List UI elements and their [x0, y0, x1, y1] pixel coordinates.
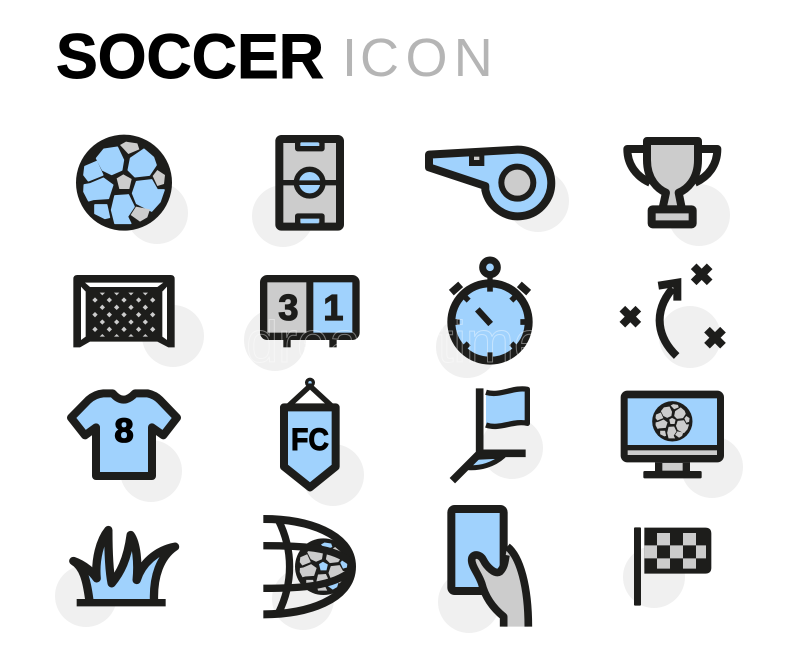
icon: checkered flag: [634, 527, 711, 606]
title: [56, 22, 493, 92]
title: SOCCER: [56, 22, 324, 92]
icon: grass: [73, 530, 175, 603]
background circles: [55, 170, 743, 633]
icon: scoreboard: [260, 275, 360, 347]
watermark: dreamstime: [246, 310, 546, 375]
icon: club pennant FC: FC: [291, 422, 329, 457]
title: ICON: [342, 28, 493, 88]
icon: corner flag: [452, 388, 527, 481]
icon: club pennant FC: [284, 378, 336, 487]
icon: trophy: [627, 141, 717, 224]
icon: scoreboard: 3: [278, 287, 298, 328]
icon: scoreboard: 1: [323, 287, 343, 328]
icon: tactics plan: [622, 266, 723, 356]
icon: ball in net: [263, 519, 352, 614]
icon: whistle: [429, 150, 551, 216]
icon: tv monitor with ball: [621, 391, 724, 478]
icon: jersey number 8: 8: [114, 412, 134, 450]
icon: goal with net: [73, 275, 175, 347]
icon: jersey number 8: [71, 393, 177, 476]
icon: stopwatch: [451, 260, 529, 361]
icon: soccer field: [279, 139, 340, 227]
icon: hand holding card: [451, 509, 528, 627]
icon: soccer ball: [76, 135, 172, 231]
